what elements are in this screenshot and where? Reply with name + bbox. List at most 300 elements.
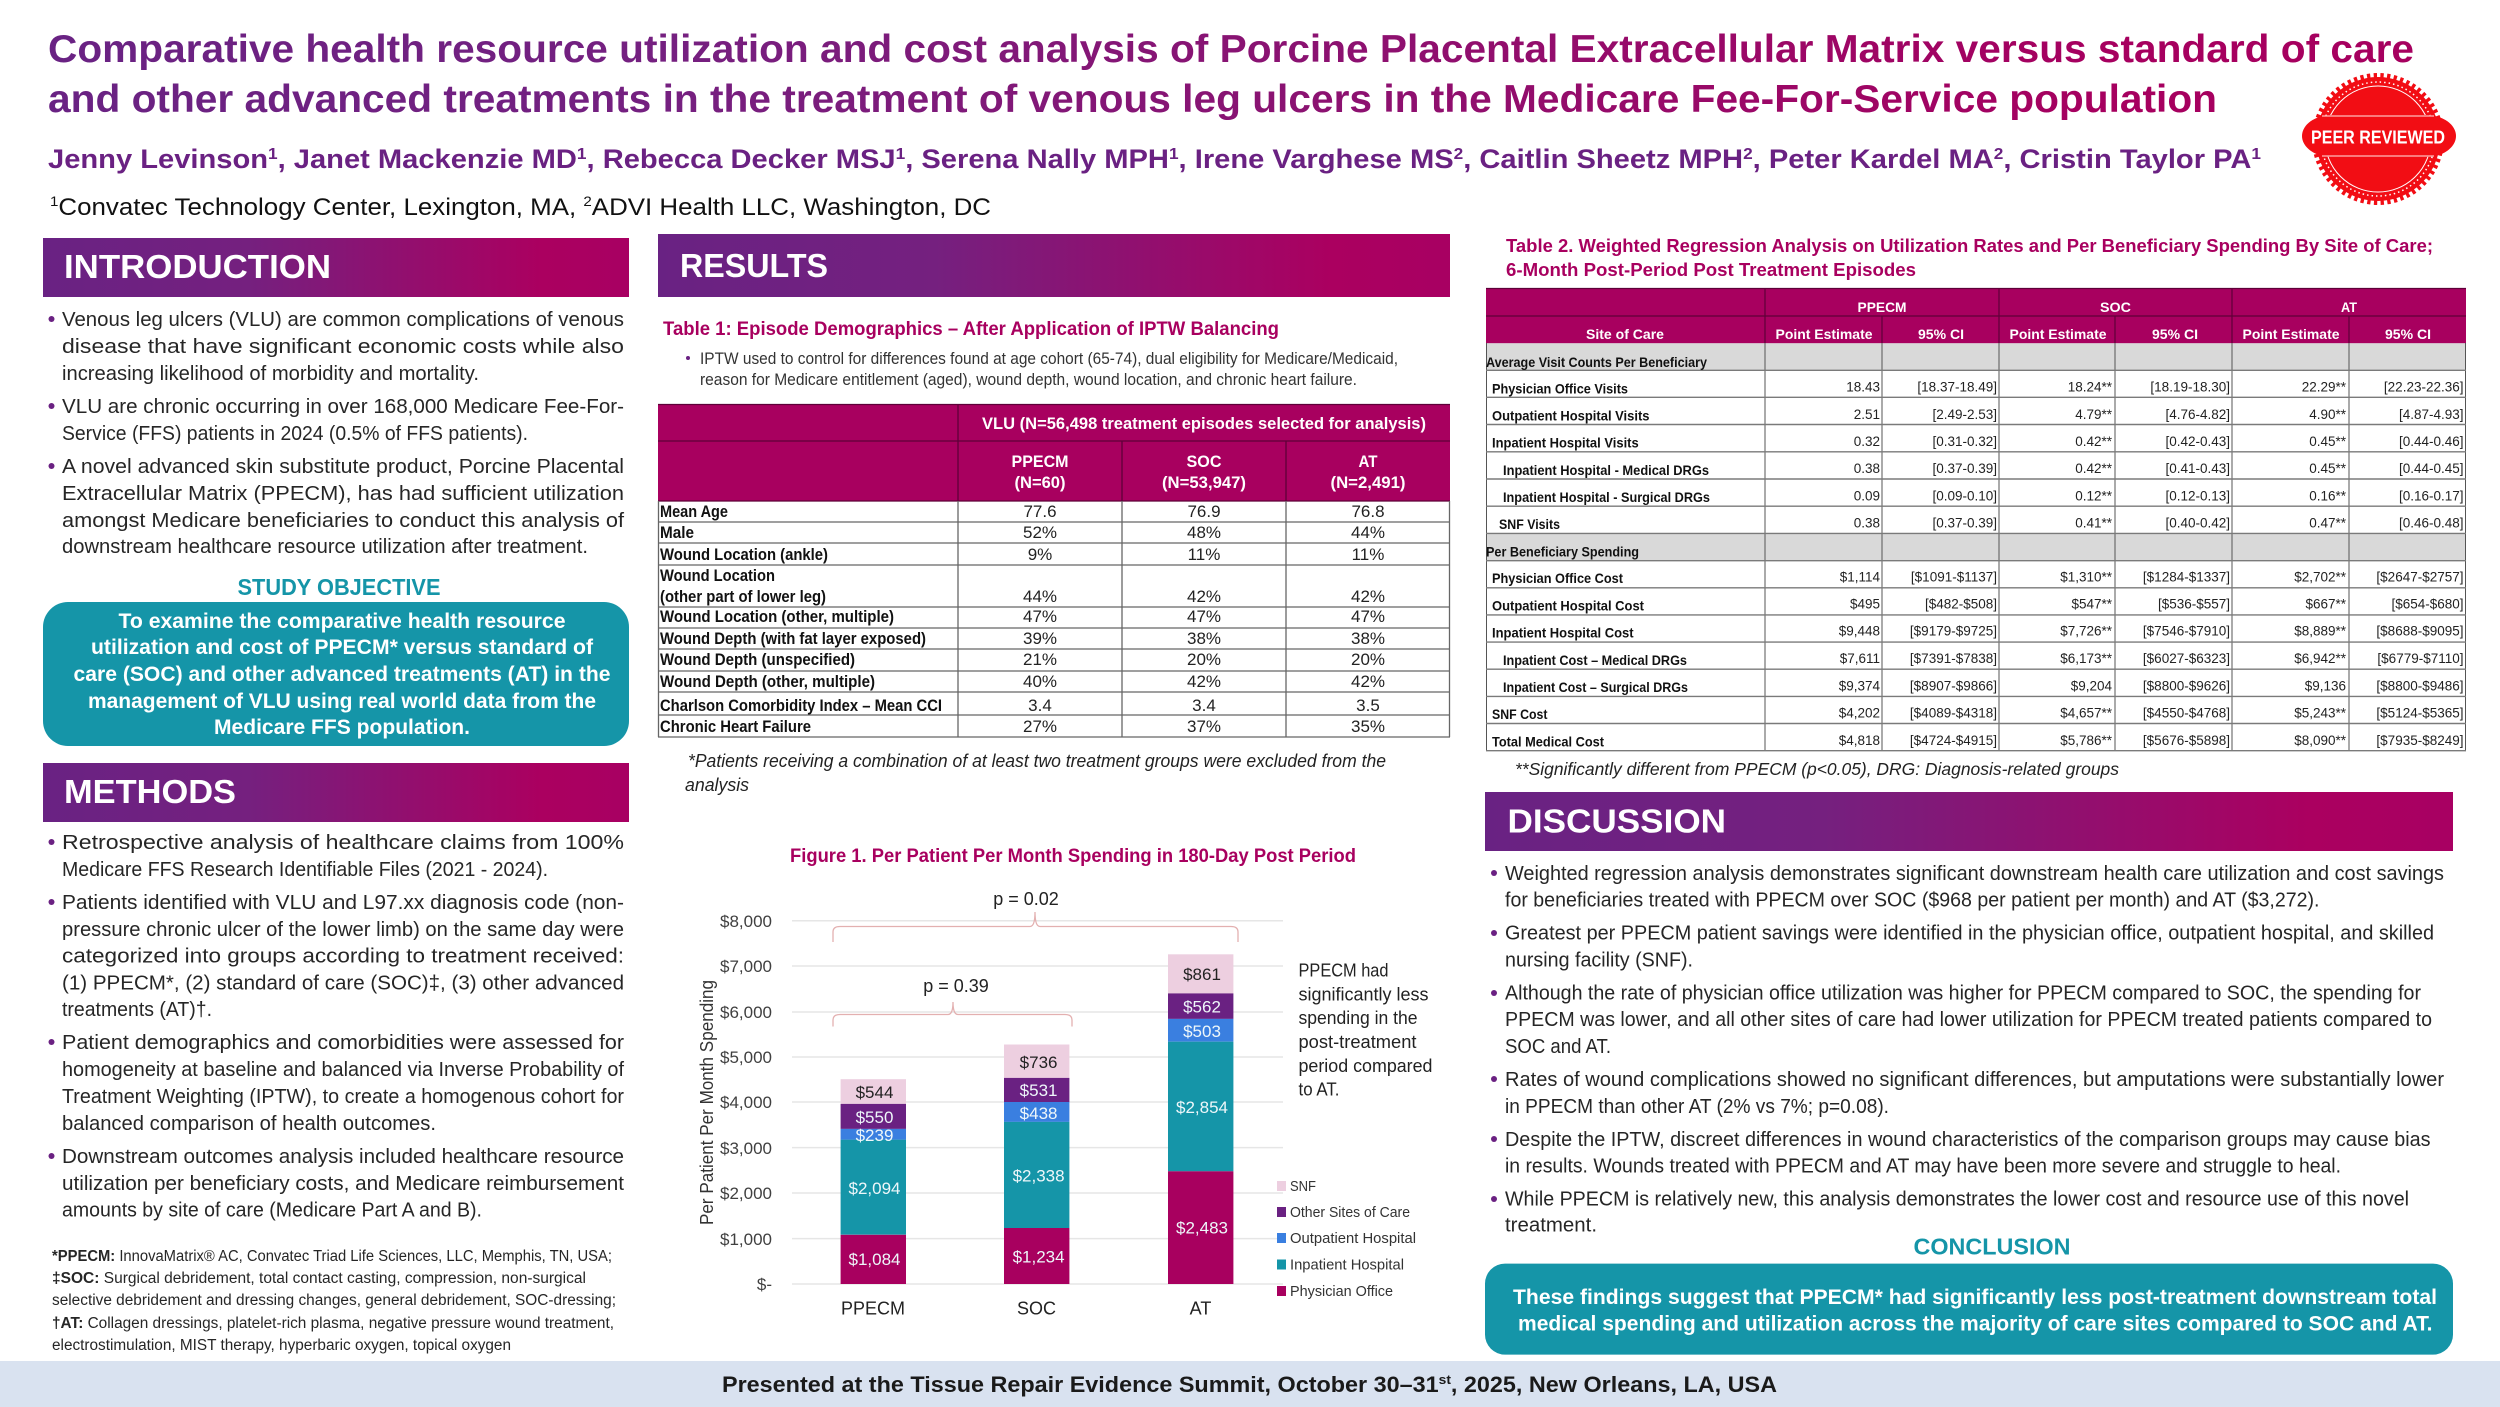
table 2 title (1506, 236, 2433, 280)
text block: introduction bullets (48, 309, 624, 558)
section: per beneficiary spending: $6,942** (2294, 651, 2347, 666)
footer band: , 2025, New Orleans, LA, USA (1451, 1372, 1777, 1397)
section: average visit counts: [18.19-18.30] (2150, 380, 2230, 395)
callout: study objective: care (SOC) and other advanced treatments (AT) in the (74, 663, 610, 686)
text block: methods bullets: balanced comparison of health outcomes. (62, 1113, 436, 1135)
x axis labels: AT (1190, 1298, 1211, 1318)
text block: methods bullets: amounts by site of care (Medicare Part A and B). (62, 1200, 482, 1222)
section: per beneficiary spending: [$8688-$9095] (2376, 624, 2464, 639)
section: per beneficiary spending: $6,173** (2060, 651, 2113, 666)
table 1 rows: 47% (1023, 607, 1057, 626)
table 2 header: Point Estimate (1776, 326, 1873, 342)
section: average visit counts (1486, 354, 2464, 532)
table 1 rows: 42% (1187, 587, 1221, 606)
bar: AT: $2,854 (1176, 1098, 1228, 1117)
section: per beneficiary spending: [$9179-$9725] (1910, 624, 1997, 639)
callout: conclusion: medical spending and utilization across the majority of care sites compared to SOC and AT. (1518, 1313, 2432, 1336)
table 1 rows: 35% (1351, 717, 1385, 736)
text block: IPTW note: reason for Medicare entitlement (aged), wound depth, wound location, and chronic heart failure. (700, 371, 1357, 389)
section: average visit counts: 0.47** (2309, 516, 2347, 531)
section: per beneficiary spending: $5,243** (2294, 706, 2347, 721)
section: average visit counts: SNF Visits (1499, 516, 1560, 532)
authors: 1 (1169, 146, 1179, 163)
figure 1: stacked bar chart (697, 846, 1432, 1318)
table 2 header: AT (2341, 299, 2357, 315)
section: per beneficiary spending: [$4724-$4915] (1910, 733, 1997, 748)
text block: methods bullets: Patients identified with VLU and L97.xx diagnosis code (non- (62, 892, 624, 914)
callout: study objective: Medicare FFS population. (214, 716, 470, 739)
table 2 footnote: **Significantly different from PPECM (p<0.05), DRG: Diagnosis-related groups (1515, 759, 2119, 779)
affiliations: 2 (583, 193, 592, 209)
text block: treatment definitions footnote: †AT: Collagen dressings, platelet-rich plasma, negative pressure wound treatment, (52, 1315, 614, 1332)
table 1 rows: 44% (1023, 587, 1057, 606)
x axis labels: PPECM (841, 1298, 905, 1318)
authors: , Caitlin Sheetz MPH (1463, 144, 1743, 174)
y axis ticks and gridlines: $4,000 (720, 1093, 772, 1112)
text block: methods bullets: treatments (AT)†. (62, 999, 212, 1021)
table 1 rows: Chronic Heart Failure (660, 718, 811, 736)
table 2 header: Site of Care (1586, 326, 1664, 342)
bar: PPECM: $239 (856, 1126, 893, 1145)
section: average visit counts: 0.41** (2075, 516, 2113, 531)
text block: discussion bullets: PPECM was lower, and all other sites of care had lower utilization for PPECM treated patients compared to (1505, 1009, 2432, 1031)
text block: IPTW note (686, 350, 1398, 389)
section: average visit counts: [4.76-4.82] (2165, 407, 2230, 422)
text block: introduction bullets: Extracellular Matrix (PPECM), has had sufficient utilization (62, 483, 624, 505)
text block: methods bullets: (1) PPECM*, (2) standard of care (SOC)‡, (3) other advanced (62, 972, 624, 994)
table 1 rows: (other part of lower leg) (660, 588, 826, 606)
table 2 header: Point Estimate (2242, 326, 2340, 342)
text block: introduction bullets: VLU are chronic occurring in over 168,000 Medicare Fee-For- (62, 396, 624, 418)
section: per beneficiary spending: $9,374 (1839, 679, 1880, 694)
table 1 rows: 44% (1351, 523, 1385, 542)
table 1 rows: 76.9 (1187, 502, 1221, 521)
section: per beneficiary spending: [$1091-$1137] (1911, 570, 1997, 585)
section: per beneficiary spending: [$5124-$5365] (2376, 706, 2464, 721)
section: per beneficiary spending: [$4550-$4768] (2143, 706, 2230, 721)
bar: AT: $562 (1183, 998, 1221, 1016)
title (48, 28, 2414, 121)
bar: SOC: $2,338 (1013, 1166, 1065, 1186)
table 2 shaded section rows (1486, 343, 2466, 561)
text block: discussion bullets: Weighted regression analysis demonstrates significant downstream health care utilization and cost savings (1505, 863, 2444, 885)
bar: SOC (1004, 1044, 1069, 1284)
authors: , Rebecca Decker MSJ (587, 144, 896, 174)
chart legend: SNF (1290, 1179, 1316, 1195)
bar: SOC: $1,234 (1013, 1248, 1065, 1266)
text block: methods bullets: categorized into groups according to treatment received: (62, 946, 624, 968)
heading: results (658, 234, 1450, 297)
text block: introduction bullets: increasing likelihood of morbidity and mortality. (62, 363, 479, 385)
icon: peer reviewed seal: PEER REVIEWED (2311, 128, 2445, 148)
section: average visit counts: 0.38 (1854, 461, 1880, 476)
section: per beneficiary spending: $1,310** (2060, 570, 2113, 585)
section: average visit counts: 22.29** (2302, 380, 2347, 395)
y axis ticks and gridlines: $1,000 (720, 1230, 772, 1249)
bar: AT (1168, 954, 1233, 1284)
table 1 rows: 47% (1351, 607, 1385, 626)
table 1 rows: 42% (1187, 672, 1221, 691)
heading: conclusion: CONCLUSION (1914, 1234, 2070, 1260)
table 1 header: (N=53,947) (1162, 473, 1246, 492)
text block: treatment definitions footnote: *PPECM: InnovaMatrix® AC, Convatec Triad Life Sciences, LLC, Memphis, TN, USA; (52, 1248, 612, 1265)
section: average visit counts: 4.79** (2075, 407, 2113, 422)
section: per beneficiary spending: [$7935-$8249] (2376, 733, 2464, 748)
chart legend: Physician Office (1290, 1284, 1393, 1300)
table 1 rows: 3.4 (1192, 696, 1216, 715)
table 1 header: SOC (1186, 452, 1222, 471)
section: average visit counts: 18.43 (1846, 380, 1880, 395)
section: per beneficiary spending: [$6027-$6323] (2143, 651, 2230, 666)
authors: , Janet Mackenzie MD (278, 144, 577, 174)
text block: introduction bullets: amongst Medicare beneficiaries to conduct this analysis of (62, 510, 624, 532)
text block: discussion bullets: in PPECM than other AT (2% vs 7%; p=0.08). (1505, 1096, 1889, 1118)
section: per beneficiary spending: [$2647-$2757] (2376, 570, 2464, 585)
table 1 rows: 42% (1351, 587, 1385, 606)
table 1 rows: 48% (1187, 523, 1221, 542)
table 2 grid (1486, 343, 2466, 751)
section: average visit counts: 18.24** (2068, 380, 2113, 395)
text block: discussion bullets (1491, 863, 2444, 1237)
callout: chart annotation: post-treatment (1298, 1032, 1416, 1052)
table 2 header: SOC (2100, 299, 2131, 315)
text block: discussion bullets: nursing facility (SNF). (1505, 949, 1693, 971)
text block: discussion bullets: SOC and AT. (1505, 1036, 1611, 1058)
y axis title: Per Patient Per Month Spending (697, 980, 717, 1225)
y axis ticks and gridlines: $8,000 (720, 912, 772, 931)
section: per beneficiary spending: $547** (2071, 597, 2113, 612)
text block: IPTW note: IPTW used to control for differences found at age cohort (65-74), dual eligibility for Medicare/Medicaid, (700, 350, 1398, 368)
table 1 rows: 27% (1023, 717, 1057, 736)
text block: methods bullets (48, 832, 624, 1222)
section: average visit counts: Inpatient Hospital - Medical DRGs (1503, 462, 1709, 478)
text block: discussion bullets: Although the rate of physician office utilization was higher for PPECM compared to SOC, the spending for (1505, 982, 2421, 1004)
section: average visit counts: [0.09-0.10] (1932, 489, 1997, 504)
section: average visit counts: 4.90** (2309, 407, 2347, 422)
authors: , Irene Varghese MS (1179, 144, 1454, 174)
callout: study objective: management of VLU using real world data from the (88, 690, 596, 713)
authors: , Peter Kardel MA (1753, 144, 1994, 174)
table 1: episode demographics (658, 404, 1450, 737)
section: per beneficiary spending: $4,818 (1839, 733, 1880, 748)
section: per beneficiary spending: $9,204 (2071, 679, 2112, 694)
callout: study objective: utilization and cost of PPECM* versus standard of (91, 636, 594, 659)
footer band: Presented at the Tissue Repair Evidence Summit, October 30–31 (722, 1372, 1397, 1397)
table 1 rows: Wound Depth (with fat layer exposed) (660, 630, 926, 648)
table 1 rows: Charlson Comorbidity Index – Mean CCI (660, 697, 942, 715)
text block: methods bullets: Retrospective analysis of healthcare claims from 100% (62, 832, 624, 854)
text block: introduction bullets: Service (FFS) patients in 2024 (0.5% of FFS patients). (62, 423, 528, 445)
section: average visit counts: [0.46-0.48] (2399, 516, 2464, 531)
table 1 rows: 40% (1023, 672, 1057, 691)
section: average visit counts: 2.51 (1854, 407, 1880, 422)
section: average visit counts: [0.44-0.45] (2399, 461, 2464, 476)
bar: AT: $861 (1183, 965, 1221, 984)
section: per beneficiary spending: [$7546-$7910] (2143, 624, 2230, 639)
section: per beneficiary spending: $7,611 (1840, 651, 1880, 666)
callout: chart annotation: significantly less (1298, 985, 1428, 1005)
section: per beneficiary spending: $667** (2305, 597, 2347, 612)
section: per beneficiary spending: $4,657** (2060, 706, 2113, 721)
table 2 header: 95% CI (1918, 326, 1964, 342)
heading: results: RESULTS (680, 247, 828, 284)
callout: study objective: To examine the comparative health resource (118, 610, 566, 633)
table 1 rows: 47% (1187, 607, 1221, 626)
table 1 rows: Wound Location (other, multiple) (660, 608, 894, 626)
table 1 rows: 20% (1351, 650, 1385, 669)
table 1 rows: 3.4 (1028, 696, 1052, 715)
table 1 rows: Wound Depth (unspecified) (660, 651, 855, 669)
table 1 rows: 11% (1352, 545, 1384, 564)
section: average visit counts: 0.12** (2075, 489, 2113, 504)
table 1 rows: Male (660, 524, 694, 542)
brace: PPECM vs SOC (833, 976, 1072, 1026)
table 2 header: 95% CI (2385, 326, 2431, 342)
authors: 1 (268, 146, 278, 163)
table 1 rows: 37% (1187, 717, 1221, 736)
table 1 header: VLU (N=56,498 treatment episodes selected for analysis) (982, 414, 1426, 433)
authors: 1 (577, 146, 587, 163)
section: average visit counts: [2.49-2.53] (1932, 407, 1997, 422)
section: per beneficiary spending: $7,726** (2060, 624, 2113, 639)
y axis ticks and gridlines: $- (757, 1275, 772, 1294)
y axis ticks and gridlines: $6,000 (720, 1003, 772, 1022)
section: per beneficiary spending: [$654-$680] (2391, 597, 2464, 612)
table 1 rows: 38% (1187, 629, 1221, 648)
brace: PPECM vs SOC: p = 0.39 (923, 976, 989, 996)
bar: AT: $2,483 (1176, 1219, 1228, 1238)
panel: introduction (43, 238, 629, 746)
table 1 header: AT (1358, 452, 1378, 471)
table 2 header: PPECM (1858, 299, 1906, 315)
authors: , Cristin Taylor PA (2003, 144, 2251, 174)
section: per beneficiary spending: $8,889** (2294, 624, 2347, 639)
text block: discussion bullets: Rates of wound complications showed no significant differences, but amputations were substantially lower (1505, 1069, 2444, 1091)
section: per beneficiary spending: $9,136 (2305, 679, 2346, 694)
callout: conclusion: These findings suggest that PPECM* had significantly less post-treatment downstream total (1513, 1286, 2437, 1309)
table 1 rows: Mean Age (660, 503, 728, 521)
table 1 rows: 20% (1187, 650, 1221, 669)
title: and other advanced treatments in the treatment of venous leg ulcers in the Medicare Fee-For-Service population (48, 78, 2217, 121)
section: average visit counts: 0.42** (2075, 434, 2113, 449)
text block: discussion bullets: Greatest per PPECM patient savings were identified in the physician office, outpatient hospital, and skilled (1505, 923, 2434, 945)
chart legend (1277, 1179, 1416, 1300)
section: per beneficiary spending: $8,090** (2294, 733, 2347, 748)
table 1 rows: Wound Depth (other, multiple) (660, 673, 875, 691)
table 2 header: Point Estimate (2010, 326, 2107, 342)
table 2 header (1486, 288, 2466, 343)
chart legend: Outpatient Hospital (1290, 1231, 1416, 1247)
text block: methods bullets: Treatment Weighting (IPTW), to create a homogenous cohort for (62, 1086, 624, 1108)
callout: conclusion (1485, 1264, 2453, 1355)
text block: introduction bullets: Venous leg ulcers (VLU) are common complications of venous (62, 309, 624, 331)
section: average visit counts: Physician Office Visits (1492, 380, 1628, 396)
table 1 rows: 38% (1351, 629, 1385, 648)
section: per beneficiary spending: [$8907-$9866] (1910, 679, 1997, 694)
text block: treatment definitions footnote (52, 1248, 616, 1354)
section: per beneficiary spending: Total Medical Cost (1492, 734, 1604, 750)
section: average visit counts: [0.37-0.39] (1932, 516, 1997, 531)
bar: SOC: $531 (1020, 1081, 1058, 1100)
section: average visit counts: Outpatient Hospital Visits (1492, 408, 1650, 424)
section: per beneficiary spending: Inpatient Cost – Surgical DRGs (1503, 679, 1688, 695)
table 1 rows: Wound Location (ankle) (660, 546, 828, 564)
brace: PPECM vs AT (833, 889, 1238, 942)
section: average visit counts: [0.16-0.17] (2399, 489, 2464, 504)
text block: methods bullets: Medicare FFS Research Identifiable Files (2021 - 2024). (62, 859, 548, 881)
section: average visit counts: 0.45** (2309, 434, 2347, 449)
footer band (0, 1361, 2500, 1407)
authors: 2 (1994, 146, 2003, 163)
text block: discussion bullets: Despite the IPTW, discreet differences in wound characteristics of the comparison groups may cause bias (1505, 1129, 2431, 1151)
table 1 rows: 52% (1023, 523, 1057, 542)
bar: SOC: $736 (1020, 1053, 1058, 1072)
section: average visit counts: [0.37-0.39] (1932, 461, 1997, 476)
table 1 footnote: analysis (685, 775, 749, 795)
table 1 rows: 77.6 (1023, 502, 1057, 521)
bar: PPECM (841, 1079, 906, 1284)
section: average visit counts: [0.40-0.42] (2165, 516, 2230, 531)
callout: chart annotation: spending in the (1298, 1008, 1418, 1028)
bar: PPECM: $550 (856, 1108, 893, 1127)
affiliations: ADVI Health LLC, Washington, DC (592, 194, 991, 221)
icon: peer reviewed seal (2302, 76, 2456, 202)
table 1 rows: Wound Location (660, 567, 775, 585)
section: per beneficiary spending: Per Beneficiary Spending (1486, 544, 1639, 560)
authors: 2 (1743, 146, 1753, 163)
table 2 title: 6-Month Post-Period Post Treatment Episodes (1506, 260, 1916, 280)
callout: study objective (43, 602, 629, 746)
text block: methods bullets: pressure chronic ulcer of the lower limb) on the same day were (62, 919, 624, 941)
bar: AT: $503 (1183, 1022, 1221, 1041)
y axis ticks and gridlines: $3,000 (720, 1139, 772, 1158)
panel: results (658, 234, 2466, 1318)
footer band: st (1439, 1372, 1452, 1387)
heading: methods: METHODS (64, 773, 236, 810)
section: per beneficiary spending: Physician Office Cost (1492, 570, 1623, 586)
section: average visit counts: [0.31-0.32] (1932, 434, 1997, 449)
table 1 rows: 42% (1351, 672, 1385, 691)
section: per beneficiary spending: [$8800-$9486] (2376, 679, 2464, 694)
brace: PPECM vs AT: p = 0.02 (993, 889, 1059, 909)
section: per beneficiary spending: [$5676-$5898] (2143, 733, 2230, 748)
section: average visit counts: [0.44-0.46] (2399, 434, 2464, 449)
figure title: Figure 1. Per Patient Per Month Spending in 180-Day Post Period (790, 846, 1356, 867)
text block: methods bullets: utilization per beneficiary costs, and Medicare reimbursement (62, 1173, 624, 1195)
heading: discussion (1485, 792, 2453, 851)
section: average visit counts: 0.45** (2309, 461, 2347, 476)
section: average visit counts: [0.41-0.43] (2165, 461, 2230, 476)
text block: methods bullets: Downstream outcomes analysis included healthcare resource (62, 1146, 624, 1168)
table 2: weighted regression (1486, 288, 2466, 751)
section: average visit counts: 0.09 (1854, 489, 1880, 504)
panel: discussion (1485, 792, 2453, 1355)
heading: introduction: INTRODUCTION (64, 248, 331, 285)
text block: introduction bullets: A novel advanced skin substitute product, Porcine Placental (62, 456, 624, 478)
section: per beneficiary spending: [$536-$557] (2158, 597, 2230, 612)
table 1 header: (N=2,491) (1330, 473, 1406, 492)
section: per beneficiary spending: Outpatient Hospital Cost (1492, 598, 1644, 614)
section: average visit counts: Inpatient Hospital - Surgical DRGs (1503, 489, 1710, 505)
section: per beneficiary spending: [$482-$508] (1925, 597, 1997, 612)
text block: discussion bullets: in results. Wounds treated with PPECM and AT may have been more severe and struggle to heal. (1505, 1156, 2341, 1178)
table 1 rows: 39% (1023, 629, 1057, 648)
table 1 footnote: *Patients receiving a combination of at least two treatment groups were excluded from the (688, 751, 1386, 771)
section: per beneficiary spending: [$6779-$7110] (2377, 651, 2464, 666)
section: average visit counts: 0.38 (1854, 516, 1880, 531)
section: per beneficiary spending: $1,114 (1840, 570, 1880, 585)
callout: chart annotation: to AT. (1298, 1080, 1340, 1100)
heading: introduction (43, 238, 629, 297)
affiliations: Convatec Technology Center, Lexington, MA, (58, 194, 583, 221)
title: Comparative health resource utilization and cost analysis of Porcine Placental Extracellular Matrix versus standard of care (48, 28, 2414, 71)
text block: treatment definitions footnote: electrostimulation, MIST therapy, hyperbaric oxygen, topical oxygen (52, 1337, 511, 1354)
bar: PPECM: $2,094 (848, 1179, 900, 1198)
callout: chart annotation (1298, 961, 1432, 1100)
section: per beneficiary spending: $4,202 (1839, 706, 1880, 721)
authors: Jenny Levinson (48, 144, 252, 174)
affiliations: 1 (50, 193, 59, 209)
table 1 grid (658, 501, 1450, 737)
heading: discussion: DISCUSSION (1508, 802, 1726, 840)
text block: treatment definitions footnote: selective debridement and dressing changes, general debridement, SOC-dressing; (52, 1292, 616, 1309)
text block: methods bullets: Patient demographics and comorbidities were assessed for (62, 1032, 624, 1054)
authors: 2 (1454, 146, 1463, 163)
table 1 header (658, 404, 1450, 501)
chart legend: Other Sites of Care (1290, 1205, 1410, 1221)
section: per beneficiary spending: $5,786** (2060, 733, 2113, 748)
authors: 1 (2251, 146, 2261, 163)
table 2 header: 95% CI (2152, 326, 2198, 342)
table 1 rows (660, 502, 1385, 736)
authors: 1 (896, 146, 905, 163)
section: average visit counts: 0.42** (2075, 461, 2113, 476)
text block: methods bullets: homogeneity at baseline and balanced via Inverse Probability of (62, 1059, 624, 1081)
section: average visit counts: [0.12-0.13] (2165, 489, 2230, 504)
y axis ticks and gridlines: $7,000 (720, 957, 772, 976)
table 1 rows: 11% (1188, 545, 1220, 564)
section: per beneficiary spending: [$7391-$7838] (1910, 651, 1997, 666)
section: per beneficiary spending: $9,448 (1839, 624, 1880, 639)
section: average visit counts: 0.16** (2309, 489, 2347, 504)
section: per beneficiary spending: SNF Cost (1492, 706, 1548, 722)
bar: PPECM: $1,084 (848, 1250, 900, 1269)
chart legend: Inpatient Hospital (1290, 1258, 1404, 1274)
table 1 footnote (685, 751, 1386, 795)
authors: , Serena Nally MPH (905, 144, 1169, 174)
y axis ticks and gridlines (720, 912, 1283, 1294)
callout: chart annotation: period compared (1298, 1056, 1432, 1076)
section: average visit counts: [0.42-0.43] (2165, 434, 2230, 449)
bar: SOC: $438 (1020, 1104, 1058, 1123)
panel: methods (43, 763, 629, 1354)
callout: chart annotation: PPECM had (1298, 961, 1388, 981)
table 1 rows: 76.8 (1351, 502, 1385, 521)
section: average visit counts: [22.23-22.36] (2384, 380, 2464, 395)
y axis ticks and gridlines: $2,000 (720, 1184, 772, 1203)
section: per beneficiary spending: [$4089-$4318] (1910, 706, 1997, 721)
text block: discussion bullets: treatment. (1505, 1215, 1597, 1237)
text block: introduction bullets: downstream healthcare resource utilization after treatment. (62, 536, 588, 558)
text block: discussion bullets: While PPECM is relatively new, this analysis demonstrates the lower cost and resource use of this novel (1505, 1189, 2409, 1211)
text block: treatment definitions footnote: ‡SOC: Surgical debridement, total contact casting, compression, non-surgical (52, 1270, 586, 1287)
table 1 header: PPECM (1012, 452, 1068, 471)
section: per beneficiary spending: Inpatient Cost – Medical DRGs (1503, 652, 1687, 668)
table 1 rows: 21% (1023, 650, 1057, 669)
text block: introduction bullets: disease that have significant economic costs while also (62, 336, 624, 358)
section: per beneficiary spending: $2,702** (2294, 570, 2347, 585)
bar: PPECM: $544 (856, 1083, 893, 1102)
